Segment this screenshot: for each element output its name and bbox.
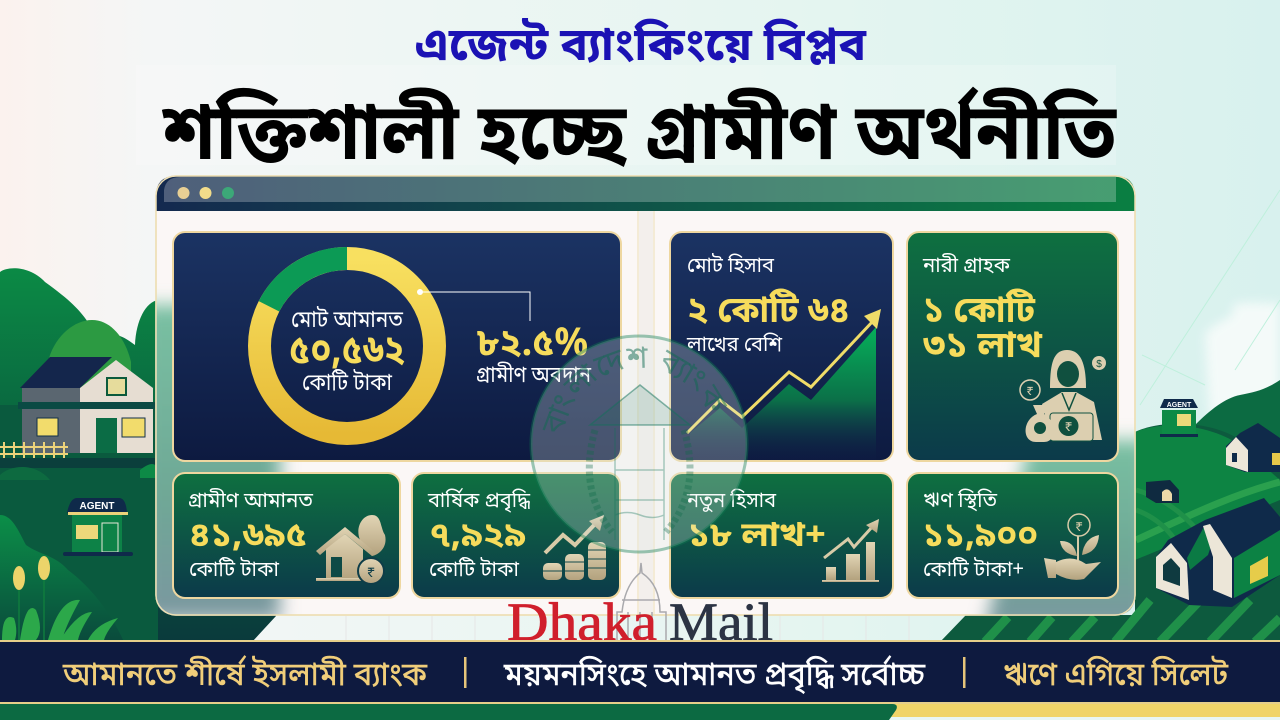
donut chart bbox=[260, 258, 434, 434]
icon: bar chart arrow bbox=[822, 519, 879, 582]
icon: woman with money: $ bbox=[1096, 359, 1102, 370]
headline line two: শক্তিশালী হচ্ছে গ্রামীণ অর্থনীতি bbox=[161, 86, 1117, 191]
icon: agent booth left bbox=[63, 498, 133, 556]
callout rural share: ৮২.৫% bbox=[477, 320, 588, 371]
heading: মোট হিসাব bbox=[687, 253, 774, 281]
icon: house with coin: ₹ bbox=[367, 564, 375, 584]
heading: ঋণ স্থিতি bbox=[923, 488, 998, 516]
watermark: Bangladesh Bank seal bbox=[530, 334, 748, 554]
value: ৭,৯২৯ bbox=[429, 515, 526, 560]
unit: কোটি টাকা+ bbox=[923, 557, 1024, 585]
sub label: লাখের বেশি bbox=[686, 332, 783, 360]
icon: woman with money: ₹ bbox=[1064, 418, 1073, 437]
heading: নতুন হিসাব bbox=[686, 488, 776, 516]
panel: annual growth bbox=[412, 473, 620, 598]
panel: women customers: ৩১ লাখ bbox=[923, 324, 1042, 372]
panel: total deposit bbox=[173, 232, 621, 461]
icon: hut bbox=[1146, 480, 1179, 503]
illustration: house bbox=[0, 357, 158, 480]
footer band bbox=[0, 640, 1280, 704]
unit: কোটি টাকা bbox=[189, 557, 279, 585]
heading: বার্ষিক প্রবৃদ্ধি bbox=[427, 487, 531, 516]
icon: rising coins bbox=[543, 515, 606, 580]
panel: dashboard window bbox=[140, 176, 1150, 630]
bottom colour strip bbox=[0, 704, 1280, 720]
watermark: Bangladesh Bank seal: বাংলাদেশ ব্যাংক bbox=[542, 346, 728, 432]
seal roof bbox=[590, 385, 690, 425]
heading: গ্রামীণ আমানত bbox=[188, 488, 314, 516]
donut centre text: কোটি টাকা bbox=[302, 370, 393, 400]
icon: hand holding plant: ₹ bbox=[1075, 518, 1083, 537]
icon: agent booth right: AGENT bbox=[1167, 402, 1192, 409]
logo: Dhaka Mail: Mail bbox=[669, 592, 773, 652]
panel: loan balance bbox=[907, 473, 1118, 598]
icon: agent booth left: AGENT bbox=[80, 501, 114, 512]
logo: Dhaka Mail bbox=[507, 563, 773, 652]
icon: woman with money: ₹ bbox=[1026, 384, 1034, 401]
title bbox=[136, 18, 1117, 191]
value: ১ কোটি bbox=[923, 289, 1036, 337]
donut centre text: ৫০,৫৬২ bbox=[289, 327, 405, 380]
headline line one: এজেন্ট ব্যাংকিংয়ে বিপ্লব bbox=[415, 18, 867, 79]
icon: large house right bbox=[1156, 498, 1280, 607]
value: ২ কোটি ৬৪ bbox=[687, 289, 850, 337]
donut centre text bbox=[289, 307, 405, 400]
heading: নারী গ্রাহক bbox=[922, 253, 1011, 281]
highlight: Mymensingh: ময়মনসিংহে আমানত প্রবৃদ্ধি সর্বোচ্চ bbox=[503, 655, 926, 699]
value: ১৮ লাখ+ bbox=[688, 515, 826, 560]
window title bar bbox=[156, 176, 1135, 211]
value: ১১,৯০০ bbox=[923, 515, 1038, 560]
icon: house with coin bbox=[316, 515, 386, 584]
unit: কোটি টাকা bbox=[429, 557, 519, 585]
donut centre text: মোট আমানত bbox=[291, 307, 404, 337]
icon: woman with money bbox=[1020, 350, 1106, 442]
icon: hand holding plant bbox=[1044, 514, 1101, 580]
panel: rural deposit bbox=[173, 473, 400, 598]
panel: total accounts bbox=[670, 232, 893, 461]
callout rural share: গ্রামীণ অবদান bbox=[476, 362, 592, 391]
background grid below window bbox=[346, 616, 909, 640]
panel: new accounts bbox=[670, 473, 893, 598]
icon: building sketch bbox=[617, 563, 666, 640]
illustration: right farm landscape bbox=[940, 190, 1280, 642]
highlight: Sylhet: ঋণে এগিয়ে সিলেট bbox=[1003, 656, 1228, 699]
icon: agent booth right bbox=[1160, 399, 1198, 437]
panel: women customers bbox=[907, 232, 1118, 461]
title band bbox=[136, 65, 1116, 165]
illustration: wheat and leaves bbox=[2, 556, 118, 640]
growth chart bbox=[687, 309, 881, 460]
callout line bbox=[417, 289, 530, 321]
icon: small house right bbox=[1226, 423, 1280, 472]
illustration: left village landscape bbox=[0, 268, 290, 642]
value: ৪১,৬৯৫ bbox=[189, 515, 307, 560]
highlight: Islami Bank: আমানতে শীর্ষে ইসলামী ব্যাংক bbox=[62, 655, 428, 699]
logo: Dhaka Mail: Dhaka bbox=[507, 592, 657, 652]
